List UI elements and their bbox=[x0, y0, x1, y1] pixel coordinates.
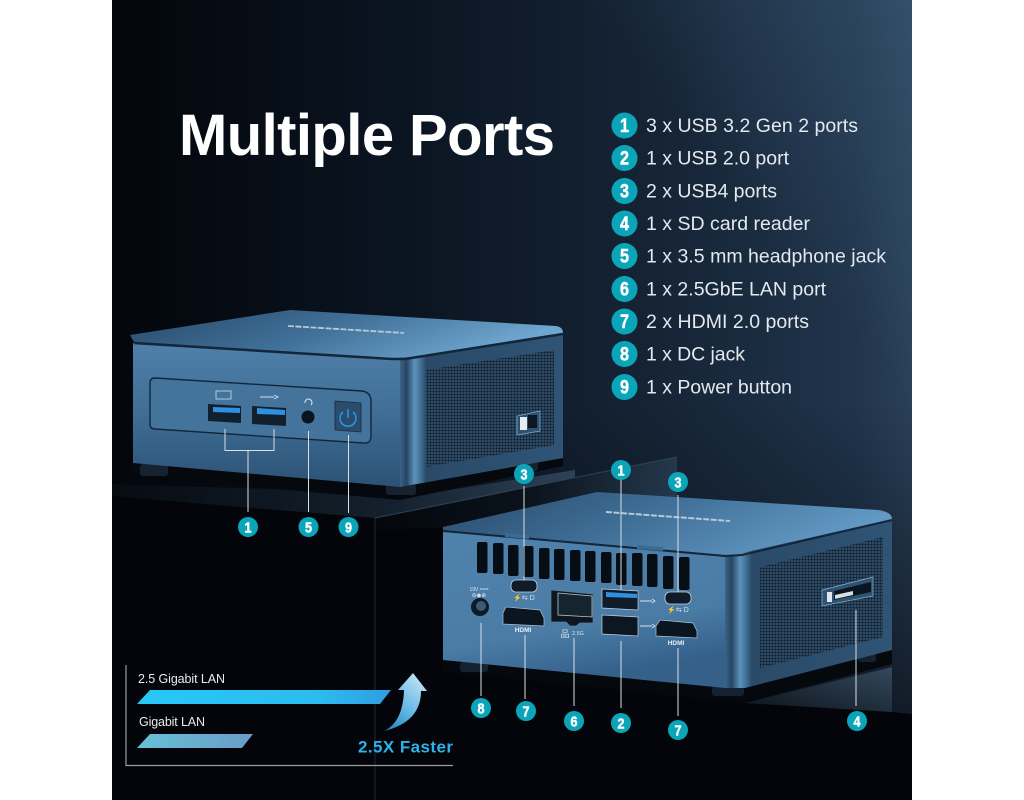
side mesh grille bbox=[426, 350, 554, 467]
badge 9 bbox=[338, 517, 358, 537]
lid bbox=[130, 310, 563, 358]
lid notches bbox=[505, 533, 663, 551]
list item 6: 6 bbox=[620, 280, 629, 300]
badge 7 left: 7 bbox=[522, 704, 530, 720]
list item 8: 8 bbox=[620, 344, 629, 366]
body side face bbox=[400, 332, 563, 487]
list item 2: 2 bbox=[620, 148, 629, 170]
list item 7: 7 bbox=[620, 312, 629, 333]
DC jack: 19V === bbox=[469, 587, 489, 593]
LAN port bbox=[551, 590, 593, 639]
USB-C left: ⚡⇆ D bbox=[513, 593, 535, 602]
USB port 2 bbox=[252, 395, 286, 426]
front callouts bbox=[225, 429, 348, 513]
HDMI right bbox=[656, 620, 697, 647]
DC jack: ⊖◆⊕ bbox=[472, 593, 486, 599]
body rear face bbox=[443, 530, 725, 688]
lid bbox=[443, 492, 892, 555]
badge 7 left bbox=[516, 701, 536, 721]
badge 6: 6 bbox=[570, 714, 578, 730]
badge 5 bbox=[298, 517, 318, 537]
badge 7 right: 7 bbox=[674, 722, 682, 740]
dark background panel bbox=[112, 0, 912, 800]
label: 2.5X Faster: 2.5X Faster bbox=[358, 738, 453, 756]
mini PC front view bbox=[130, 310, 563, 500]
list item 1: 3 x USB 3.2 Gen 2 ports bbox=[646, 115, 858, 137]
headphone jack bbox=[302, 399, 314, 424]
chart axes bbox=[126, 665, 453, 766]
USB-C left bbox=[511, 580, 537, 602]
side mesh grille bbox=[760, 537, 883, 668]
body front face bbox=[133, 343, 400, 487]
badge 7 right bbox=[668, 720, 688, 740]
USB 2 port rear bbox=[602, 615, 655, 636]
badge 6 bbox=[564, 711, 584, 731]
list item 7 bbox=[612, 308, 809, 334]
list item 5: 1 x 3.5 mm headphone jack bbox=[646, 246, 886, 268]
logo bbox=[606, 512, 730, 521]
badge 4 bbox=[847, 711, 867, 731]
USB port 1 bbox=[208, 391, 241, 423]
HDMI left: HDMI bbox=[515, 627, 531, 634]
HDMI right: HDMI bbox=[668, 640, 684, 647]
label: 2.5 Gigabit LAN: 2.5 Gigabit LAN bbox=[138, 672, 225, 686]
mini PC rear view bbox=[443, 492, 892, 703]
list item 5: 5 bbox=[620, 246, 629, 268]
title: Multiple Ports bbox=[179, 103, 555, 168]
arrow: faster bbox=[384, 673, 427, 731]
badge 3 left: 3 bbox=[520, 466, 528, 484]
LAN speed chart bbox=[126, 665, 453, 766]
body side face bbox=[725, 518, 892, 688]
list item 4 bbox=[612, 210, 810, 236]
badge 2 bbox=[611, 713, 631, 733]
list item 3 bbox=[612, 178, 777, 204]
badge 3 right bbox=[668, 472, 688, 492]
list item 1: 1 bbox=[620, 116, 629, 137]
badge 1 front bbox=[238, 517, 258, 537]
badge 9: 9 bbox=[345, 520, 352, 536]
list item 7: 2 x HDMI 2.0 ports bbox=[646, 311, 809, 333]
port list bbox=[612, 112, 886, 400]
list item 2 bbox=[612, 145, 790, 171]
list item 9 bbox=[612, 374, 792, 400]
badge 4: 4 bbox=[854, 714, 861, 730]
badge 1 rear bbox=[611, 460, 631, 480]
vent slots bbox=[477, 542, 690, 590]
lock slot bbox=[517, 411, 540, 435]
rear callouts bbox=[481, 480, 856, 716]
DC jack bbox=[469, 587, 489, 616]
badge 5: 5 bbox=[305, 520, 312, 536]
bar: 2.5 Gigabit LAN bbox=[137, 690, 391, 704]
USB-C right bbox=[665, 592, 691, 614]
USB 3 port rear bbox=[602, 589, 655, 610]
feet bbox=[140, 460, 538, 495]
list item 9: 1 x Power button bbox=[646, 376, 792, 398]
badge 8 bbox=[471, 698, 491, 718]
bar: Gigabit LAN bbox=[137, 734, 253, 748]
HDMI left bbox=[503, 607, 544, 634]
list item 9: 9 bbox=[620, 378, 629, 398]
USB-C right: ⚡⇆ D bbox=[667, 605, 689, 614]
list item 8 bbox=[612, 341, 745, 367]
LAN port: 品 bbox=[560, 629, 570, 639]
list item 4: 1 x SD card reader bbox=[646, 213, 810, 235]
badge 8: 8 bbox=[478, 700, 484, 718]
label: Gigabit LAN: Gigabit LAN bbox=[139, 715, 205, 729]
logo bbox=[288, 326, 404, 333]
recessed front panel bbox=[150, 378, 371, 443]
badge 3 right: 3 bbox=[674, 474, 682, 492]
list item 3: 3 bbox=[620, 182, 629, 202]
badge 1 rear: 1 bbox=[618, 462, 624, 480]
list item 6: 1 x 2.5GbE LAN port bbox=[646, 278, 827, 300]
badge 2: 2 bbox=[618, 716, 624, 732]
badge 3 left bbox=[514, 464, 534, 484]
LAN port: 2.5G bbox=[572, 631, 584, 637]
list item 3: 2 x USB4 ports bbox=[646, 180, 777, 202]
feet bbox=[460, 652, 876, 696]
SD card slot bbox=[822, 577, 873, 606]
shadow under body bbox=[443, 650, 892, 703]
list item 2: 1 x USB 2.0 port bbox=[646, 148, 790, 170]
badge 1 front: 1 bbox=[244, 520, 252, 536]
shadow under body bbox=[133, 458, 563, 500]
power button bbox=[335, 401, 361, 432]
list item 8: 1 x DC jack bbox=[646, 344, 745, 366]
list item 4: 4 bbox=[620, 214, 629, 235]
